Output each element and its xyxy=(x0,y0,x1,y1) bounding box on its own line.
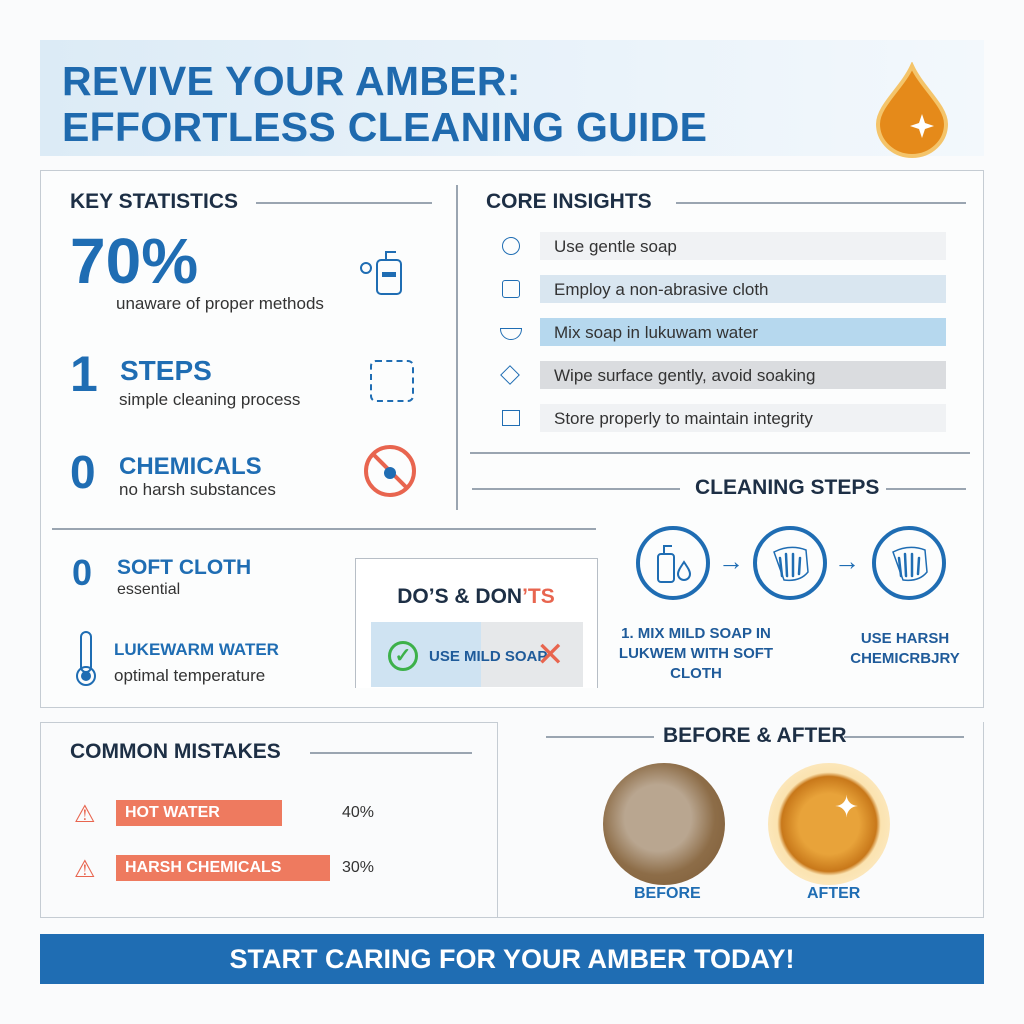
panel: dos and donts: DO’S & DON’TS xyxy=(397,585,555,608)
text: USE HARSH CHEMICRBJRY xyxy=(850,630,960,667)
heading: core insights: CORE INSIGHTS xyxy=(486,190,652,213)
title: REVIVE YOUR AMBER: xyxy=(62,58,521,104)
text: BEFORE xyxy=(634,885,701,902)
heading: common mistakes: COMMON MISTAKES xyxy=(70,740,281,763)
stat chemicals: 0 xyxy=(70,446,96,498)
panel: dos and donts: ✕ xyxy=(536,636,564,674)
insights list: Store properly to maintain integrity xyxy=(554,409,813,428)
steps icons: → xyxy=(718,546,744,576)
stat 70%: 70% xyxy=(70,225,198,297)
step labels: 1. MIX MILD SOAP IN LUKWEM WITH SOFT CLOTH xyxy=(619,625,773,682)
icon: soap xyxy=(360,251,402,295)
panel: lower xyxy=(40,722,984,918)
title: EFFORTLESS CLEANING GUIDE xyxy=(62,104,707,150)
panel: dos and donts: USE MILD SOAP xyxy=(429,648,547,665)
stat steps: STEPS xyxy=(120,355,212,386)
stat lukewarm water: LUKEWARM WATER xyxy=(114,640,279,659)
footer banner: START CARING FOR YOUR AMBER TODAY! xyxy=(229,944,795,974)
stat steps: 1 xyxy=(70,346,98,402)
stat lukewarm water: optimal temperature xyxy=(114,666,265,685)
bar: hot water: ⚠ xyxy=(74,801,96,828)
bar: hot water: HOT WATER xyxy=(125,804,220,821)
image: after xyxy=(768,763,890,885)
heading: cleaning steps: CLEANING STEPS xyxy=(695,476,879,499)
bar: harsh chemicals: ⚠ xyxy=(74,856,96,883)
image: before xyxy=(603,763,725,885)
bar: hot water xyxy=(74,800,374,828)
insights list xyxy=(500,232,946,432)
icon: thermometer xyxy=(76,631,96,686)
panel: main xyxy=(40,170,984,708)
stat chemicals: CHEMICALS xyxy=(119,453,262,480)
title xyxy=(62,58,707,150)
text: ✦ xyxy=(834,791,859,824)
stat soft cloth xyxy=(72,552,251,598)
stat 70%: unaware of proper methods xyxy=(116,294,324,313)
stat 70% xyxy=(70,225,324,313)
insights list: Use gentle soap xyxy=(554,237,677,256)
heading: before and after: BEFORE & AFTER xyxy=(663,724,847,747)
footer banner xyxy=(40,934,984,984)
text: AFTER xyxy=(807,885,860,902)
stat soft cloth: essential xyxy=(117,581,180,598)
icon: no chemicals xyxy=(364,445,416,497)
stat steps: simple cleaning process xyxy=(119,390,300,409)
stat soft cloth: SOFT CLOTH xyxy=(117,556,251,579)
stat chemicals: no harsh substances xyxy=(119,480,276,499)
bar: harsh chemicals: 30% xyxy=(342,859,374,876)
insights list: Wipe surface gently, avoid soaking xyxy=(554,366,815,385)
insights list: Mix soap in lukuwam water xyxy=(554,323,758,342)
header xyxy=(40,40,984,156)
icon: amber drop xyxy=(876,62,948,158)
steps icons: → xyxy=(834,546,860,576)
panel: dos and donts: ✓ xyxy=(395,645,411,667)
stat soft cloth: 0 xyxy=(72,552,92,593)
heading: key statistics: KEY STATISTICS xyxy=(70,190,238,213)
insights list: Employ a non-abrasive cloth xyxy=(554,280,769,299)
stat steps xyxy=(70,346,300,409)
steps icons xyxy=(636,526,946,600)
icon: cloth xyxy=(370,360,414,402)
bar: harsh chemicals: HARSH CHEMICALS xyxy=(125,859,281,876)
panel: dos and donts xyxy=(355,558,598,688)
bar: harsh chemicals xyxy=(74,855,374,883)
bar: hot water: 40% xyxy=(342,804,374,821)
stat chemicals xyxy=(70,446,276,499)
stat lukewarm water xyxy=(114,640,279,685)
